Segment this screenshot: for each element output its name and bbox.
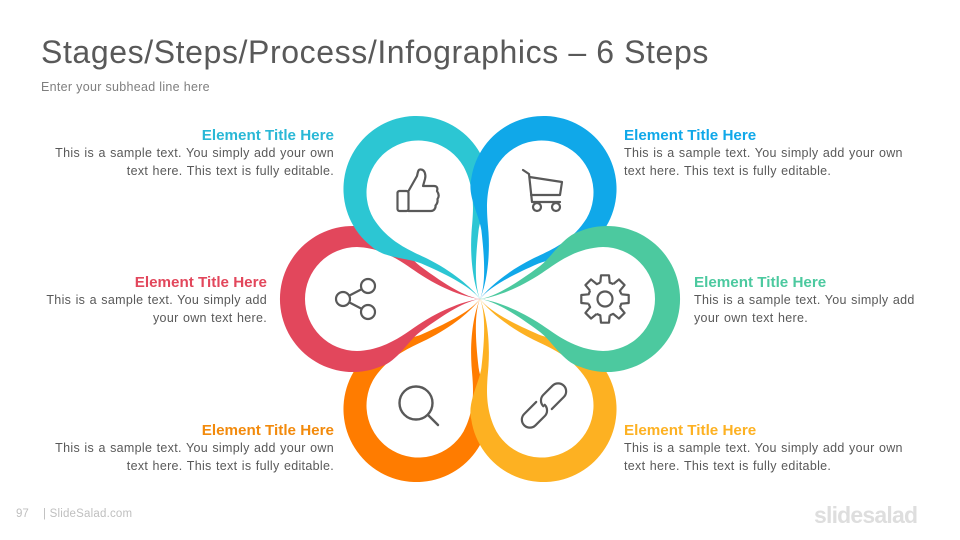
petal: green <box>480 226 680 372</box>
text block: teal step <box>55 126 334 178</box>
text block: red step: This is a sample text. You simply add <box>46 293 267 307</box>
page number: 97 <box>16 508 29 520</box>
text block: orange step: text here. This text is fully editable. <box>127 459 334 473</box>
text block: green step: Element Title Here <box>694 274 826 290</box>
text block: green step: This is a sample text. You simply add <box>694 293 915 307</box>
text block: yellow step <box>624 422 903 473</box>
text block: teal step: This is a sample text. You simply add your own <box>55 146 334 160</box>
footer source: | SlideSalad.com <box>43 508 132 520</box>
text block: blue step: Element Title Here <box>624 126 756 144</box>
text block: red step: your own text here. <box>153 311 267 325</box>
text block: orange step: This is a sample text. You simply add your own <box>55 441 334 455</box>
text block: teal step: Element Title Here <box>202 126 334 144</box>
text block: orange step <box>55 422 334 473</box>
text block: red step: Element Title Here <box>135 274 267 290</box>
petal: yellow <box>417 262 643 509</box>
text block: green step <box>694 274 915 325</box>
petal: red <box>280 226 480 372</box>
text block: red step <box>46 274 267 325</box>
icon: chain link <box>519 380 569 431</box>
text block: green step: your own text here. <box>694 311 808 325</box>
icon: magnifier <box>400 386 438 425</box>
text block: blue step: This is a sample text. You simply add your own <box>624 146 903 160</box>
icon: gear <box>581 275 629 323</box>
petal: blue <box>417 89 643 336</box>
text block: blue step: text here. This text is fully editable. <box>624 164 831 178</box>
text block: teal step: text here. This text is fully editable. <box>127 164 334 178</box>
petal: orange <box>317 262 543 509</box>
text block: yellow step: Element Title Here <box>624 422 756 438</box>
text block: orange step: Element Title Here <box>202 422 334 438</box>
logo: slidesalad <box>814 502 917 528</box>
title: Stages/Steps/Process/Infographics – 6 Steps <box>41 34 709 70</box>
icon: thumbs up <box>398 169 439 211</box>
icon: share <box>336 279 375 319</box>
petal: teal <box>317 89 543 336</box>
text block: yellow step: text here. This text is fully editable. <box>624 459 831 473</box>
icon: shopping cart <box>523 170 562 211</box>
text block: yellow step: This is a sample text. You simply add your own <box>624 441 903 455</box>
text block: blue step <box>624 126 903 178</box>
subhead: Enter your subhead line here <box>41 80 210 94</box>
